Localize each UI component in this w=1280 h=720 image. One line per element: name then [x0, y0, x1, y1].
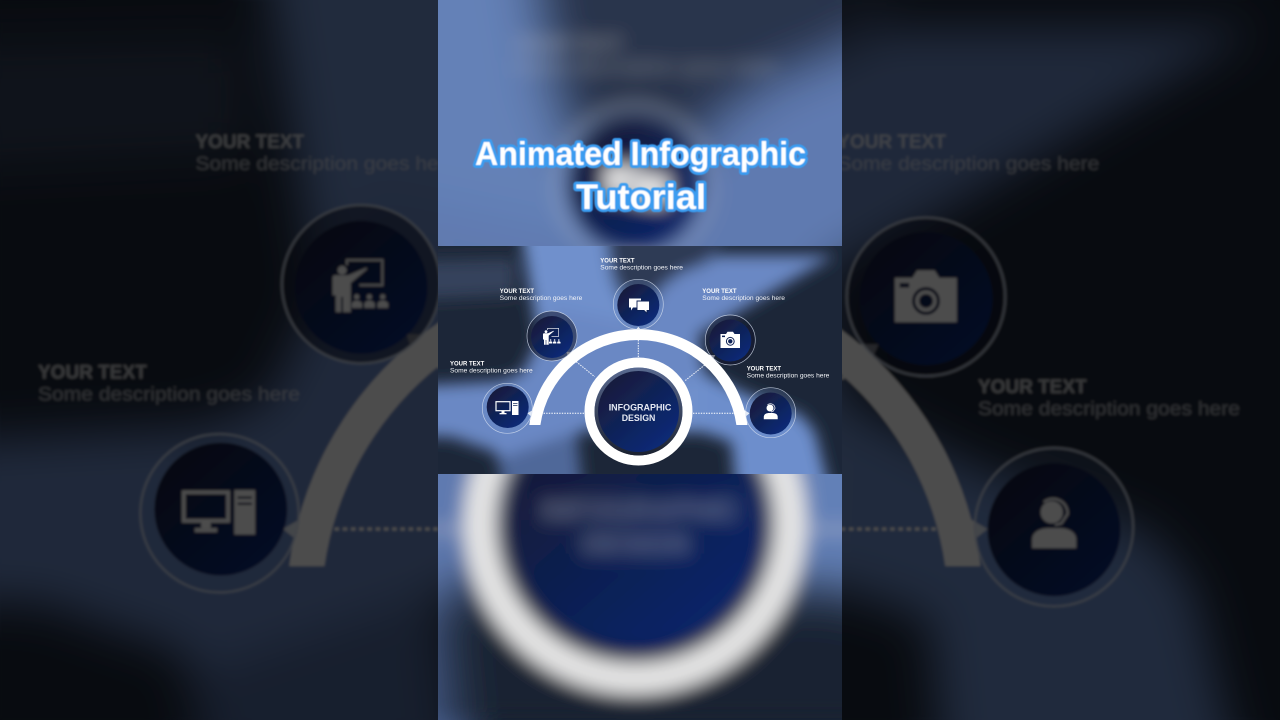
right backdrop labels: YOUR TEXT [837, 132, 946, 153]
text block: upper left label [500, 289, 583, 302]
dotted connectors [541, 340, 736, 413]
node: monitor [482, 383, 532, 433]
text block: lower left label: Some description goes here [450, 369, 533, 375]
left backdrop labels: YOUR TEXT [195, 132, 305, 153]
icon: presenter with board [543, 328, 560, 345]
text block: upper left label: Some description goes here [500, 296, 583, 302]
text block: upper right label [702, 289, 786, 302]
blurred backdrop labels: DESIGN [582, 528, 689, 560]
icon: computer [496, 401, 518, 415]
hub text: DESIGN [622, 413, 655, 423]
text block: lower right label: YOUR TEXT [747, 366, 781, 372]
left backdrop labels: Some description goes here [195, 154, 457, 175]
text block: top label [600, 258, 684, 271]
blurred backdrop labels: Some description goes here [514, 57, 776, 78]
right backdrop labels: YOUR TEXT [978, 377, 1087, 398]
text block: lower right label: Some description goes here [747, 373, 830, 379]
node: headset [746, 388, 796, 438]
title [475, 135, 806, 217]
blurred backdrop labels: INFOGRAPHIC [541, 495, 739, 527]
text block: upper right label: YOUR TEXT [702, 289, 737, 295]
text block: upper right label: Some description goes here [702, 296, 786, 302]
blurred backdrop labels [514, 35, 776, 560]
arc arrow tips [527, 327, 750, 417]
center hub [590, 362, 688, 460]
left backdrop labels: Some description goes here [38, 384, 300, 405]
semicircular arc [529, 329, 748, 425]
background photo [288, 168, 842, 473]
icon: camera [720, 332, 740, 348]
panel: center infographic card [438, 246, 842, 474]
right backdrop labels [837, 132, 1240, 420]
right backdrop labels: Some description goes here [837, 154, 1099, 175]
text block: lower left label: YOUR TEXT [450, 362, 485, 368]
node: teacher [527, 311, 577, 361]
right backdrop labels: Some description goes here [978, 399, 1240, 420]
hub text: INFOGRAPHIC [609, 402, 672, 412]
text block: top label: Some description goes here [600, 265, 684, 271]
text block: lower right label [747, 366, 830, 379]
left backdrop labels [38, 132, 457, 405]
left backdrop labels: YOUR TEXT [38, 362, 147, 383]
text block: top label: YOUR TEXT [600, 258, 635, 264]
icon: speech bubbles [629, 298, 650, 314]
title: Tutorial [576, 178, 706, 217]
text block: upper left label: YOUR TEXT [500, 289, 534, 295]
blurred backdrop labels: YOUR TEXT [514, 35, 623, 56]
text block: lower left label [450, 362, 533, 375]
node: chat [613, 279, 663, 329]
node: camera [705, 315, 755, 365]
title: Animated Infographic [475, 135, 806, 172]
hub text [609, 402, 672, 423]
icon: support agent [764, 404, 778, 419]
